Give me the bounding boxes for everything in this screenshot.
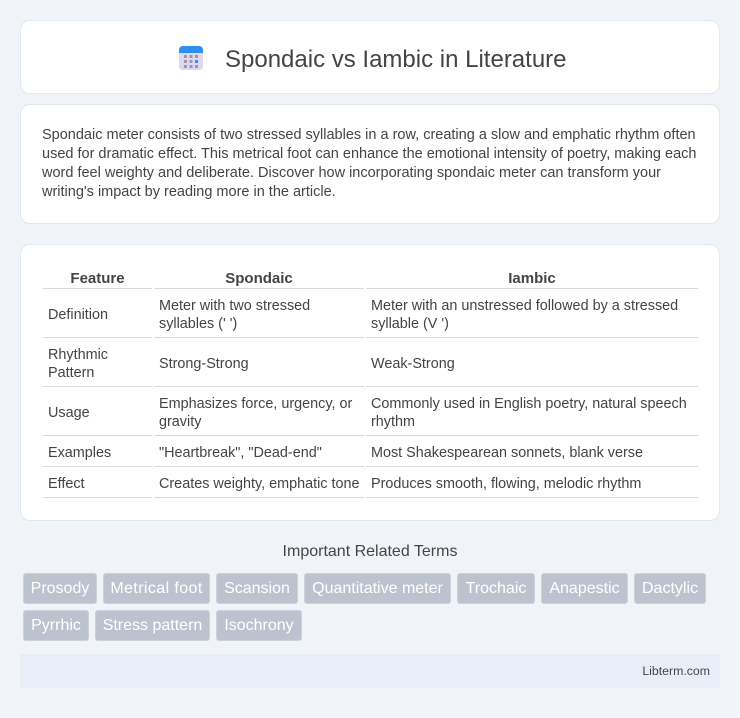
- comparison table: Strong-Strong: [159, 356, 249, 372]
- column heading: Iambic: Iambic: [508, 270, 556, 287]
- tag: [216, 610, 302, 641]
- comparison table: "Heartbreak", "Dead-end": [159, 445, 322, 461]
- tag: [23, 610, 89, 641]
- row: Effect: Effect: [48, 476, 85, 492]
- comparison table: syllables (' '): [159, 316, 237, 332]
- comparison table: Produces smooth, flowing, melodic rhythm: [371, 476, 641, 492]
- row: Rhythmic Pattern: Rhythmic: [48, 347, 108, 363]
- column heading: Spondaic: Spondaic: [225, 270, 293, 287]
- comparison table panel: [20, 244, 720, 521]
- comparison table: rhythm: [371, 414, 415, 430]
- comparison table: syllable (V '): [371, 316, 449, 332]
- tag: [634, 573, 706, 604]
- column heading: Feature: Feature: [70, 270, 125, 287]
- footer bar: [20, 654, 720, 688]
- comparison table: Most Shakespearean sonnets, blank verse: [371, 445, 643, 461]
- tag: Dactylic: [642, 580, 698, 597]
- intro text: word feel weighty and deliberate. Discover how incorporating spondaic meter can transform your: [42, 165, 661, 181]
- comparison table: Meter with two stressed: [159, 298, 310, 314]
- title: Spondaic vs Iambic in Literature: [225, 46, 567, 73]
- tag: [541, 573, 628, 604]
- intro text: writing's impact by reading more in the article.: [42, 184, 336, 200]
- tag: [95, 610, 210, 641]
- row: Examples: Examples: [48, 445, 111, 461]
- row: Rhythmic Pattern: [48, 347, 108, 381]
- header card: [20, 20, 720, 94]
- tag: [304, 573, 451, 604]
- tag: Anapestic: [549, 580, 620, 597]
- comparison table: Meter with an unstressed followed by a stressed: [371, 298, 678, 314]
- comparison table: Emphasizes force, urgency, or: [159, 396, 352, 412]
- tag: Pyrrhic: [31, 617, 81, 634]
- tag: Trochaic: [466, 580, 526, 597]
- tag: Prosody: [31, 580, 89, 597]
- row: Rhythmic Pattern: Pattern: [48, 365, 94, 381]
- tag: Isochrony: [224, 617, 294, 634]
- comparison table: Weak-Strong: [371, 356, 455, 372]
- tag: Metrical foot: [110, 580, 203, 597]
- icon: calendar: [179, 46, 203, 70]
- related terms heading: Important Related Terms: [283, 543, 457, 560]
- intro text: used for dramatic effect. This metrical foot can enhance the emotional intensity of poetry, making each: [42, 146, 696, 162]
- comparison table: Commonly used in English poetry, natural speech: [371, 396, 687, 412]
- comparison table: Creates weighty, emphatic tone: [159, 476, 360, 492]
- tag: Quantitative meter: [312, 580, 443, 597]
- intro text: Spondaic meter consists of two stressed syllables in a row, creating a slow and emphatic rhythm often: [42, 127, 696, 143]
- intro text: [42, 127, 696, 200]
- footer credit: Libterm.com: [642, 664, 710, 678]
- tag: [457, 573, 535, 604]
- tag: [23, 573, 97, 604]
- comparison table: gravity: [159, 414, 201, 430]
- tag: Stress pattern: [103, 617, 202, 634]
- intro panel: [20, 104, 720, 224]
- tag: Scansion: [224, 580, 290, 597]
- tag: [216, 573, 298, 604]
- tag: [103, 573, 210, 604]
- row: Usage: Usage: [48, 405, 90, 421]
- row: Definition: Definition: [48, 307, 108, 323]
